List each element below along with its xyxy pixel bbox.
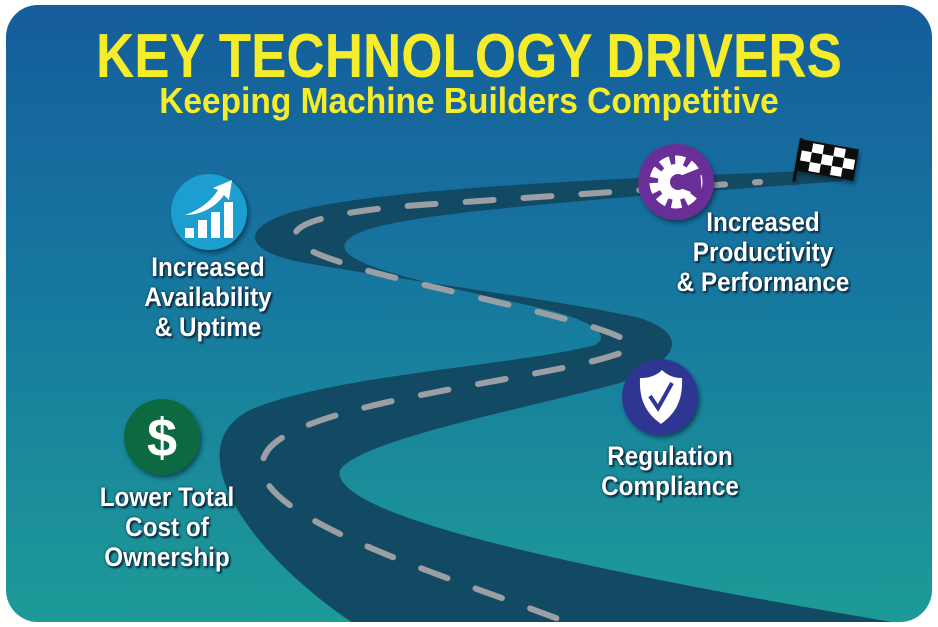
road	[220, 172, 892, 622]
text: availability: Availability	[144, 282, 272, 312]
text: regulation: Compliance	[601, 471, 739, 501]
subtitle: Keeping Machine Builders Competitive	[159, 80, 779, 121]
text: cost: Ownership	[104, 542, 230, 572]
text: availability: Increased	[151, 252, 265, 282]
text: cost: Lower Total	[100, 482, 234, 512]
text: productivity: & Performance	[677, 267, 849, 297]
icon: dollar: $	[147, 408, 177, 468]
text: productivity: Productivity	[693, 237, 833, 267]
text: availability: & Uptime	[155, 312, 261, 342]
icon: shield compliance	[622, 359, 698, 435]
text: regulation: Regulation	[607, 441, 733, 471]
text: productivity: Increased	[706, 207, 820, 237]
text: cost: Cost of	[125, 512, 209, 542]
icon: dollar	[124, 399, 200, 475]
text: regulation	[600, 441, 741, 504]
text: cost	[100, 482, 236, 575]
title: KEY TECHNOLOGY DRIVERS	[96, 22, 842, 91]
icon: gear productivity	[638, 144, 714, 220]
text: availability	[144, 252, 274, 344]
text: productivity	[676, 207, 852, 297]
icon: checkered flag	[792, 138, 858, 192]
icon: availability chart	[171, 174, 247, 250]
